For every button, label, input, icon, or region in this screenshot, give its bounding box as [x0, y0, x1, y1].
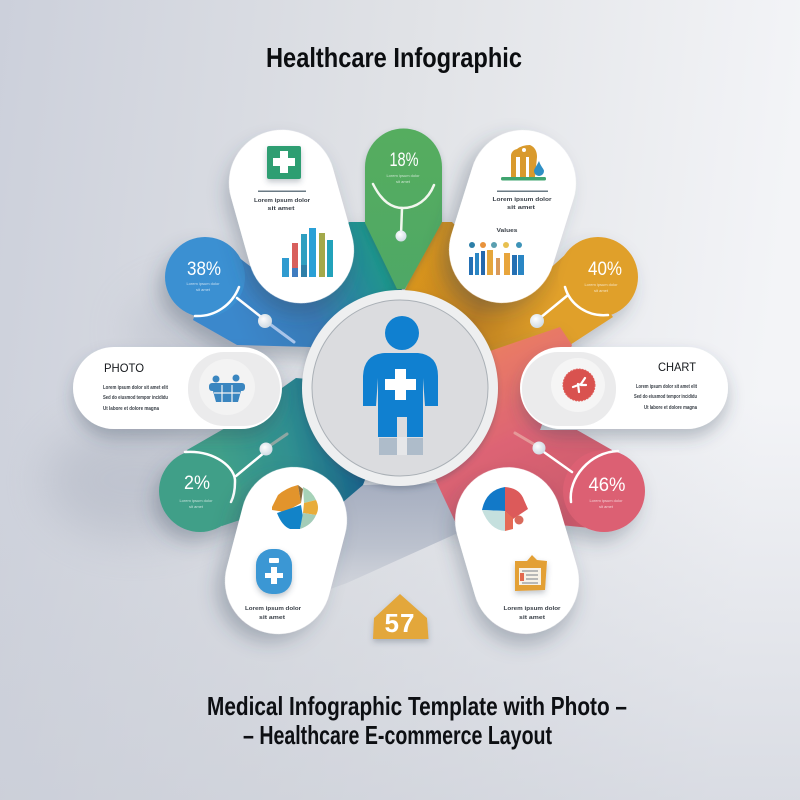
stat: 40%: 40%	[588, 259, 622, 280]
icon: blue capsule plus	[256, 549, 292, 594]
stat: 46%: 46%	[588, 475, 626, 496]
text lines: Lorem ipsum dolor sit amet elit	[636, 384, 697, 390]
bottom shadow wedge	[322, 483, 460, 592]
text lines: Sed do eiusmod tempor incididu	[634, 394, 697, 400]
connector: blue	[195, 287, 294, 342]
stat: 38%: 38%	[187, 259, 221, 280]
text lines: Ut labore et dolore magna	[644, 405, 698, 411]
subtitle	[207, 691, 627, 750]
icon: building with water drop	[501, 145, 546, 180]
title: Healthcare Infographic	[266, 42, 522, 73]
stat: 2%	[179, 434, 287, 509]
icon: medical cross square	[267, 146, 301, 179]
stat: 40%	[530, 259, 622, 328]
connector: orange	[530, 287, 608, 328]
card: bottom right	[442, 454, 592, 647]
caption: sit amet	[507, 205, 535, 211]
card: chart	[520, 347, 728, 429]
stat: 38%: Lorem ipsum dolor	[186, 281, 220, 286]
text lines	[634, 384, 698, 411]
icon: pie blob	[272, 485, 318, 529]
stat: 18%: Lorem ipsum dolor	[386, 173, 420, 178]
caption: Lorem ipsum dolor	[254, 198, 311, 204]
stat: 38%	[186, 259, 294, 342]
text lines	[103, 385, 168, 412]
connector: green	[185, 434, 287, 502]
icon: orange document	[515, 555, 547, 591]
stat: 18%: 18%	[390, 150, 419, 171]
stat: 40%: sit amet	[594, 288, 609, 293]
text lines: Sed do eiusmod tempor incididu	[103, 395, 168, 401]
text lines: Lorem ipsum dolor sit amet elit	[103, 385, 168, 391]
stat: 38%: sit amet	[196, 287, 211, 292]
petal: red	[400, 327, 645, 532]
caption	[254, 198, 311, 212]
heading: PHOTO	[104, 361, 144, 375]
petal: blue and teal	[165, 222, 402, 387]
caption: sit amet	[259, 615, 285, 621]
subtitle: – Healthcare E-commerce Layout	[243, 720, 552, 750]
stat: 46%: sit amet	[599, 504, 614, 509]
center disc	[302, 290, 498, 486]
caption	[245, 606, 302, 621]
stat: 2%: 2%	[184, 473, 210, 494]
caption: sit amet	[268, 206, 295, 212]
stat: 2%: Lorem ipsum dolor	[179, 498, 213, 503]
card: top right	[436, 117, 589, 316]
stat: 2%: sit amet	[189, 504, 204, 509]
petal: orange	[400, 222, 638, 387]
icon: stethoscope	[373, 184, 434, 242]
stat: 40%: Lorem ipsum dolor	[584, 282, 618, 287]
bar chart	[282, 228, 333, 277]
badge: 57: 57	[385, 608, 415, 638]
stat: 46%: Lorem ipsum dolor	[589, 498, 623, 503]
caption: Lorem ipsum dolor	[492, 197, 553, 203]
petal: green and dark blue	[159, 378, 400, 532]
card: photo	[73, 347, 282, 429]
caption: Values	[496, 228, 518, 234]
bar chart with dots	[469, 242, 524, 275]
icon: pie blob	[482, 487, 528, 531]
badge: 57	[373, 594, 428, 639]
caption: Lorem ipsum dolor	[245, 606, 302, 612]
icon: people at table	[199, 359, 255, 415]
caption: Lorem ipsum dolor	[504, 606, 561, 612]
stat: 46%	[515, 433, 626, 509]
card: top left	[217, 117, 366, 316]
text lines: Ut labore et dolore magna	[103, 406, 160, 412]
colored petals	[159, 128, 645, 592]
stat: 18%: sit amet	[396, 179, 411, 184]
subtitle: Medical Infographic Template with Photo –	[207, 691, 627, 721]
caption	[492, 197, 553, 234]
caption	[504, 606, 561, 621]
connector: red	[515, 433, 618, 502]
icon: red badge	[551, 358, 605, 412]
icon: person with medical cross	[363, 316, 438, 455]
card: bottom left	[213, 455, 359, 646]
petal: green teardrop	[365, 128, 442, 289]
caption: sit amet	[519, 615, 545, 621]
stat: 18%	[373, 150, 434, 242]
heading: CHART	[658, 360, 697, 374]
